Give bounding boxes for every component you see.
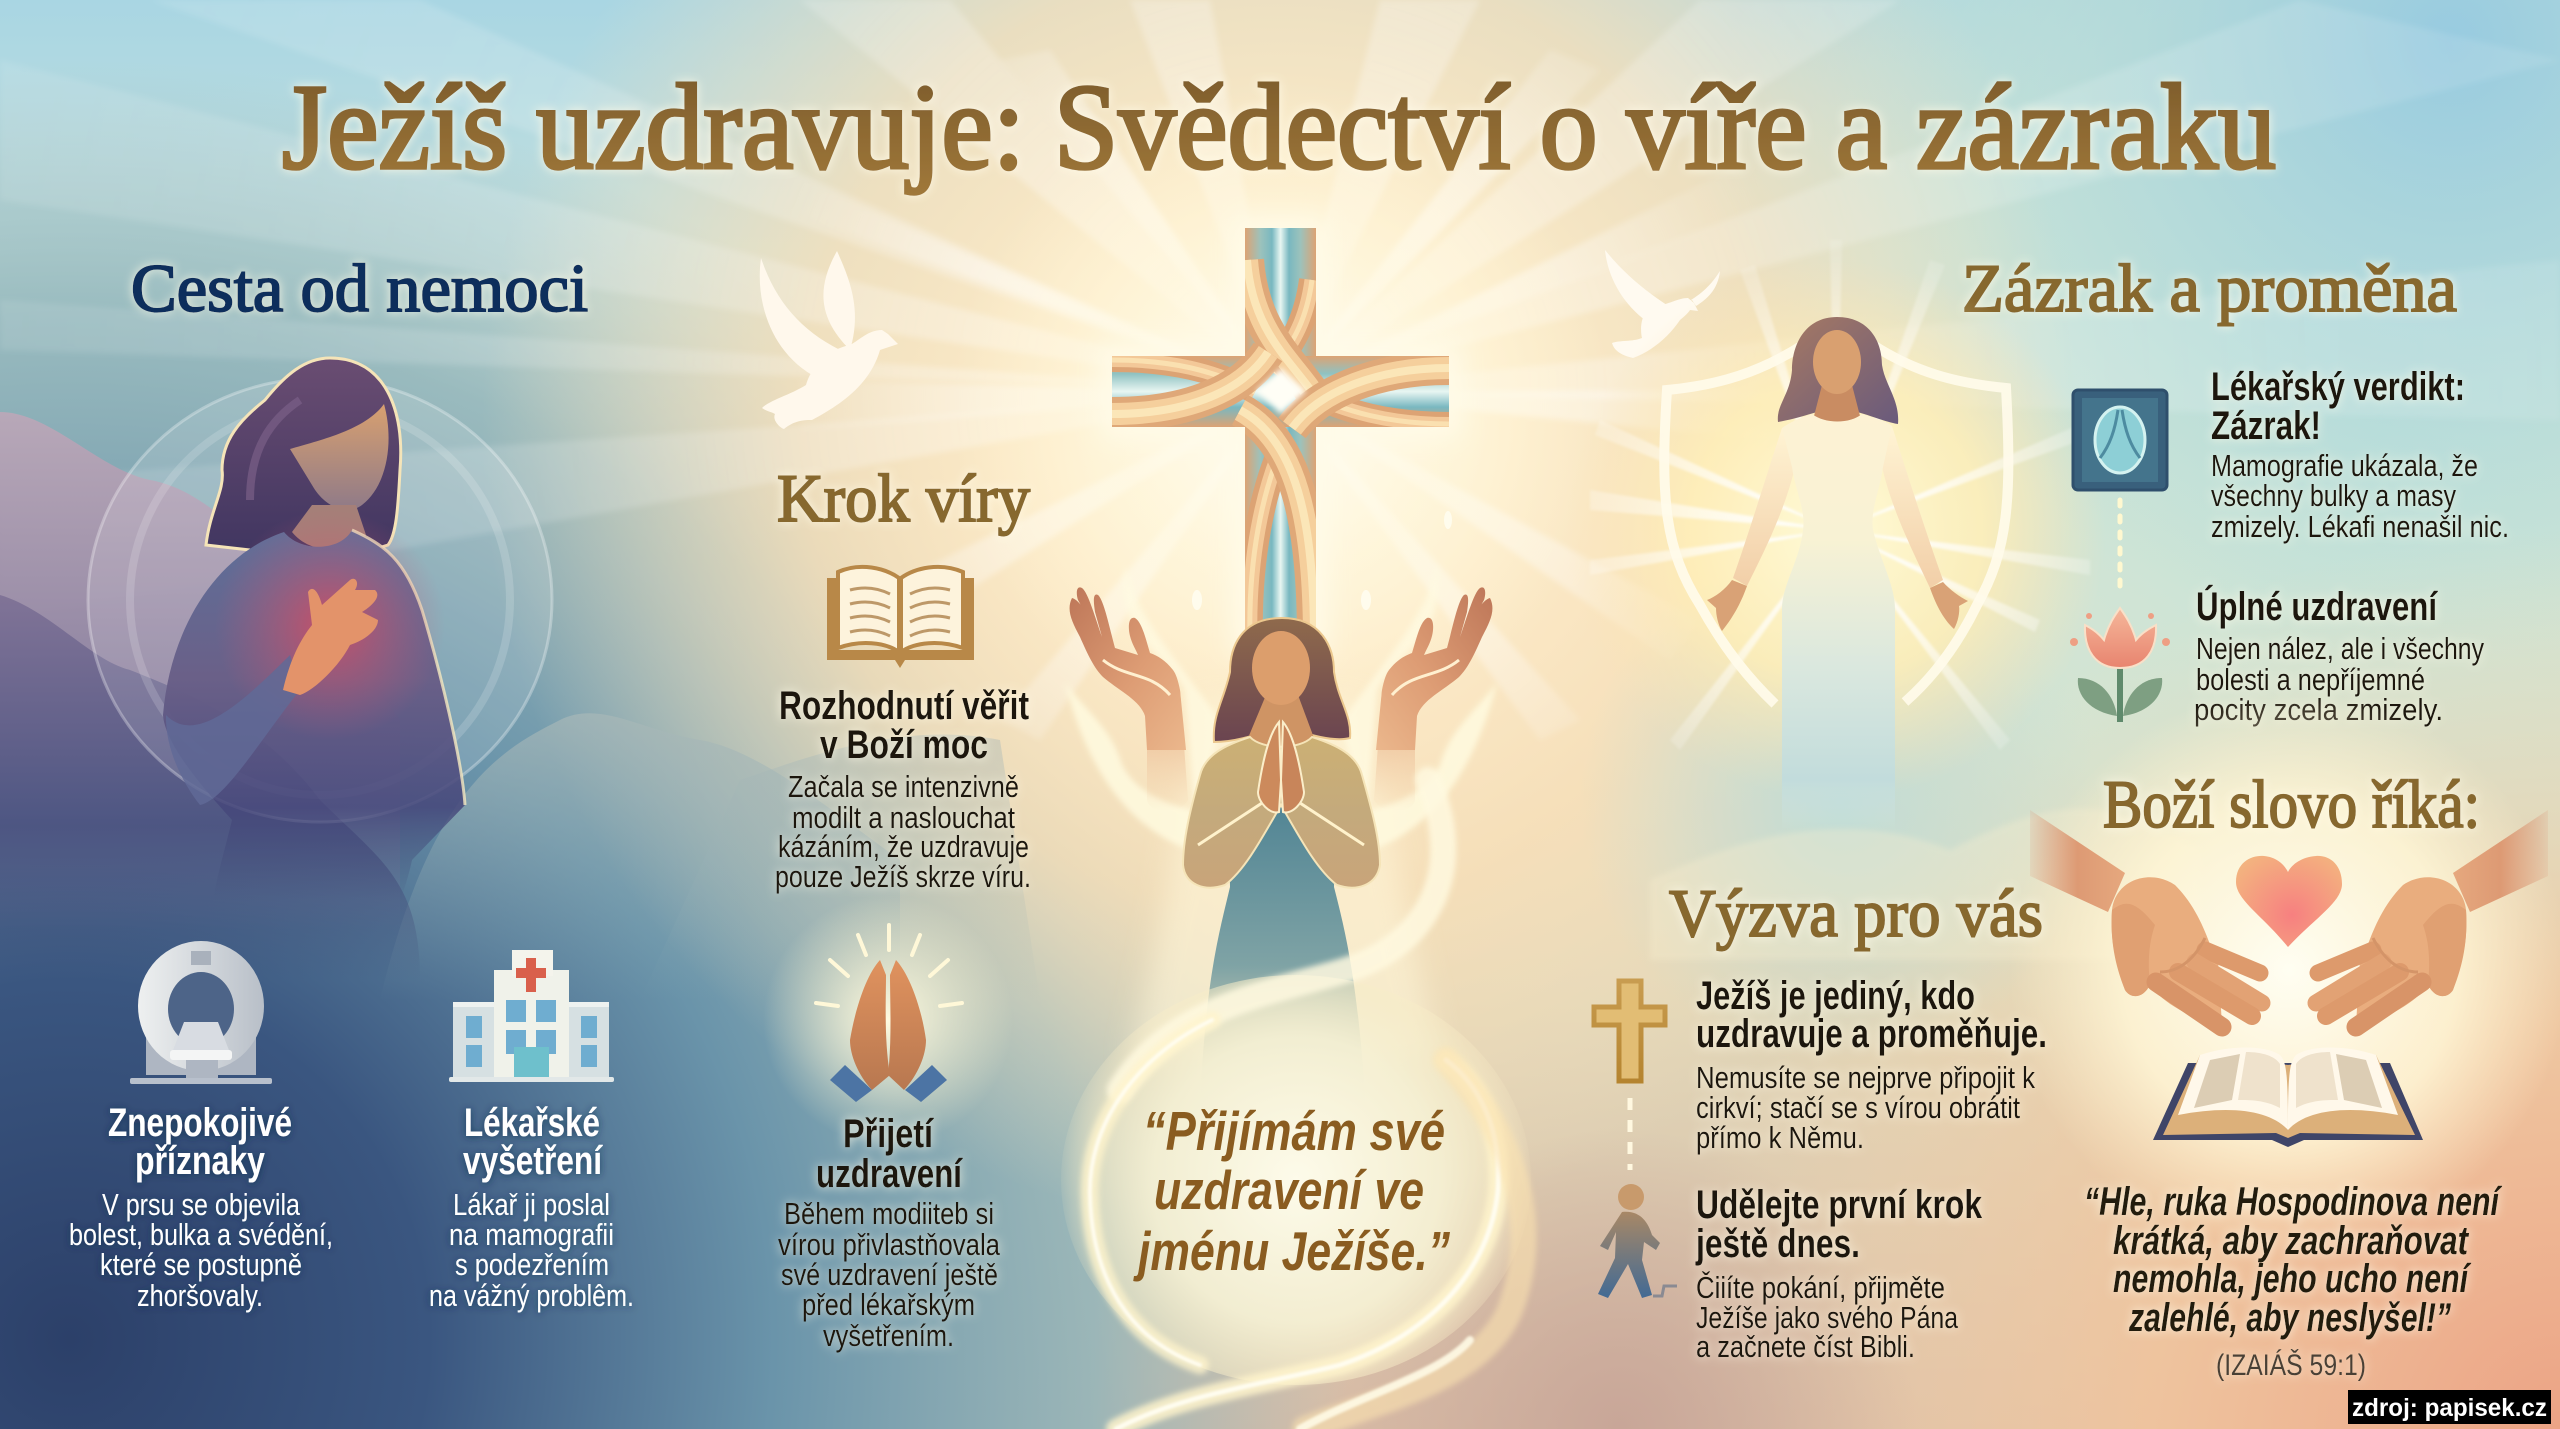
text block: lékařský verdikt: Zázrak!	[2211, 404, 2321, 448]
left light wing	[1065, 565, 1222, 850]
text block: rozhodnutí věřit: Začala se intenzivně	[788, 769, 1019, 804]
praying hands	[1258, 722, 1304, 812]
text block: udělejte první krok: Ježíše jako svého Pána	[1696, 1300, 1959, 1335]
heading: výzva pro vás: Výzva pro vás	[1669, 875, 2043, 951]
source label: zdroj: papisek.cz	[2352, 1394, 2547, 1422]
text block: znepokojivé příznaky: zhoršovaly.	[137, 1278, 263, 1313]
neck	[1814, 385, 1860, 422]
quote: přijímám své uzdravení: uzdravení ve	[1154, 1159, 1424, 1221]
text block: znepokojivé příznaky: Znepokojivé	[108, 1101, 292, 1145]
quote: izaiáš: (IZAIÁŠ 59:1)	[2216, 1348, 2366, 1382]
text block: přijetí uzdravení: uzdravení	[816, 1152, 963, 1196]
hair	[1214, 618, 1350, 742]
quote: izaiáš: krátká, aby zachraňovat	[2113, 1219, 2469, 1263]
text block: přijetí uzdravení: vírou přivlastňovala	[778, 1227, 1001, 1262]
title: Ježíš uzdravuje: Svědectví o víře a zázraku	[282, 60, 2276, 195]
heading: cesta od nemoci: Cesta od nemoci	[131, 250, 588, 326]
left raised hand	[1070, 587, 1188, 811]
heading: boží slovo říká: Boží slovo říká:	[2103, 766, 2480, 842]
text block: lékařské vyšetření: Lákař ji poslal	[453, 1187, 610, 1222]
panel: cesta od nemoci	[69, 250, 634, 1313]
illustration: praying woman with raised hands	[1065, 565, 1497, 1110]
shield outline	[1664, 345, 2008, 704]
text block: rozhodnutí věřit: kázáním, že uzdravuje	[778, 829, 1029, 864]
text block: lékařské vyšetření: na vážný problêm.	[429, 1278, 634, 1313]
face	[1813, 330, 1861, 394]
text block: přijetí uzdravení: před lékařským	[802, 1287, 975, 1322]
quote: přijímám své uzdravení: “Přijímám své	[1143, 1100, 1445, 1162]
text block: lékařské vyšetření: Lékařské	[464, 1101, 600, 1145]
text block: ježíš je jediný: uzdravuje a proměňuje.	[1696, 1012, 2047, 1056]
text block: úplné uzdravení: Nejen nález, ale i všechny	[2196, 631, 2484, 666]
text block: rozhodnutí věřit: pouze Ježíš skrze víru.	[775, 859, 1031, 894]
face	[1252, 631, 1310, 705]
icon: left open hand	[2030, 810, 2262, 1027]
text block: znepokojivé příznaky: které se postupně	[100, 1247, 302, 1282]
glow behind quote	[1061, 975, 1531, 1385]
quote: přijímám své uzdravení	[1133, 1100, 1450, 1282]
arms and shoulders	[1183, 737, 1380, 888]
text block: přijetí uzdravení	[778, 1112, 1001, 1353]
text block: přijetí uzdravení: Přijetí	[843, 1112, 935, 1156]
icon: mammography scanner	[130, 941, 272, 1084]
text block: znepokojivé příznaky: bolest, bulka a svédění,	[69, 1217, 333, 1252]
text block: ježíš je jediný: cirkví; stačí se s vírou obrátit	[1696, 1090, 2020, 1125]
icon: right open hand	[2316, 810, 2548, 1027]
text block: rozhodnutí věřit	[775, 684, 1031, 894]
sleeves	[1733, 425, 1800, 586]
text block: lékařský verdikt: Lékařský verdikt:	[2211, 365, 2465, 409]
text block: lékařský verdikt: všechny bulky a masy	[2211, 478, 2456, 513]
text block: udělejte první krok	[1695, 1183, 1983, 1364]
connector dots	[2118, 500, 2122, 590]
text block: úplné uzdravení	[2194, 583, 2484, 727]
text block: lékařský verdikt	[2211, 365, 2509, 544]
illustration: healed woman with shield	[1560, 240, 2112, 830]
hair	[1778, 317, 1898, 424]
heading: krok víry: Krok víry	[777, 460, 1030, 536]
right light wing	[1340, 565, 1497, 850]
mountains	[0, 412, 2200, 1000]
dress	[1782, 414, 1895, 830]
icon: dove left	[760, 251, 898, 429]
quote: izaiáš: zalehlé, aby neslyšel!”	[2128, 1296, 2451, 1340]
text block: úplné uzdravení: bolesti a nepříjemné	[2196, 662, 2425, 697]
text block: udělejte první krok: Čiiíte pokání, přijměte	[1696, 1270, 1945, 1305]
text block: lékařské vyšetření: na mamografii	[449, 1217, 614, 1252]
text block: znepokojivé příznaky: V prsu se objevila	[102, 1187, 301, 1222]
icon: x-ray	[2073, 390, 2167, 490]
text block: lékařské vyšetření	[429, 1101, 634, 1313]
text block: úplné uzdravení: pocity zcela zmizely.	[2194, 692, 2443, 727]
hands	[1707, 580, 1747, 631]
quote: přijímám své uzdravení: jménu Ježíše.”	[1133, 1220, 1450, 1282]
text block: znepokojivé příznaky: příznaky	[135, 1139, 266, 1183]
icon: praying hands	[763, 895, 1013, 1145]
heading: zázrak a proměna: Zázrak a proměna	[1962, 250, 2457, 326]
icon: walking person	[1598, 1184, 1677, 1298]
icon: hospital	[449, 950, 614, 1082]
text block: lékařský verdikt: Mamografie ukázala, že	[2211, 448, 2478, 483]
illustration: central cross	[1100, 216, 1461, 656]
icon: gold cross	[1594, 981, 1665, 1081]
glow behind hands	[2010, 690, 2560, 1250]
text block: udělejte první krok: ještě dnes.	[1695, 1222, 1860, 1266]
panel: výzva pro vás	[1594, 875, 2047, 1364]
text block: přijetí uzdravení: své uzdravení ještě	[781, 1257, 998, 1292]
text block: lékařské vyšetření: s podezřením	[455, 1247, 609, 1282]
panel: zázrak a proměna	[1560, 240, 2509, 830]
text block: ježíš je jediný: Ježíš je jediný, kdo	[1696, 974, 1975, 1018]
text block: přijetí uzdravení: vyšetřením.	[823, 1318, 954, 1353]
text block: úplné uzdravení: Úplné uzdravení	[2196, 583, 2438, 629]
icon: open book	[827, 567, 974, 668]
text block: znepokojivé příznaky	[69, 1101, 333, 1313]
text block: rozhodnutí věřit: Rozhodnutí věřit	[779, 684, 1029, 728]
text block: rozhodnutí věřit: v Boží moc	[820, 723, 988, 767]
text block: lékařské vyšetření: vyšetření	[463, 1139, 603, 1183]
text block: udělejte první krok: Udělejte první krok	[1696, 1183, 1983, 1227]
neck	[1248, 695, 1314, 765]
icon: dove right	[1605, 250, 1720, 358]
text block: ježíš je jediný: přímo k Němu.	[1696, 1120, 1864, 1155]
panel: boží slovo říká	[2010, 690, 2560, 1382]
dress	[1200, 790, 1366, 1110]
text block: udělejte první krok: a začnete číst Bibli.	[1696, 1329, 1915, 1364]
illustration: woman with chest pain	[88, 358, 552, 920]
icon: bible	[2153, 1048, 2423, 1147]
icon: flower	[2070, 608, 2170, 722]
text block: přijetí uzdravení: Během modiiteb si	[784, 1196, 994, 1231]
icon: heart	[2236, 856, 2342, 947]
right raised hand	[1374, 587, 1492, 811]
text block: ježíš je jediný	[1696, 974, 2047, 1155]
illustration: light ribbons	[1090, 780, 1523, 1429]
connector dashes	[1628, 1098, 1632, 1170]
text block: ježíš je jediný: Nemusíte se nejprve připojit k	[1696, 1060, 2035, 1095]
quote: izaiáš	[2084, 1180, 2503, 1382]
text block: rozhodnutí věřit: modilt a naslouchat	[792, 800, 1015, 835]
panel: krok víry	[763, 460, 1031, 1353]
